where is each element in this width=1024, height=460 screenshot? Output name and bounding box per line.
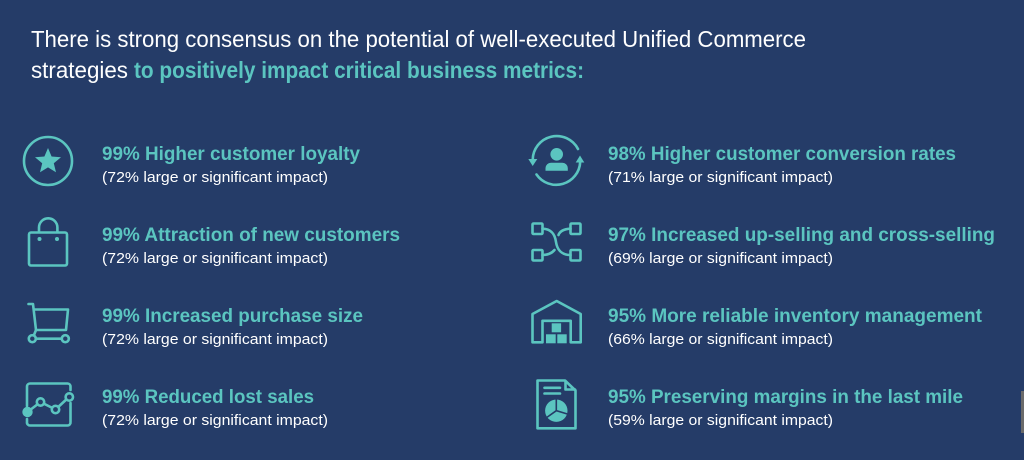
icon: shopping bag bbox=[29, 218, 67, 266]
icon: shopping cart bbox=[28, 304, 69, 342]
title: to positively impact critical business metrics: bbox=[134, 57, 584, 83]
gray scroll marker at right edge bbox=[1021, 391, 1024, 433]
title bbox=[31, 26, 806, 83]
text: customer loyalty bbox=[102, 143, 360, 186]
text: lost sales bbox=[102, 386, 328, 429]
text: margins in last mile: 95% Preserving margins in the last mile bbox=[608, 386, 963, 408]
metric: new customers bbox=[29, 218, 400, 267]
text: inventory management: (66% large or significant impact) bbox=[608, 331, 833, 348]
text: lost sales: (72% large or significant impact) bbox=[102, 412, 328, 429]
text: purchase size: 99% Increased purchase size bbox=[102, 305, 363, 327]
icon: connected nodes bbox=[532, 224, 580, 260]
metric: lost sales bbox=[22, 384, 328, 429]
icon: line chart bbox=[22, 384, 73, 426]
text: up-selling and cross-selling bbox=[608, 224, 995, 267]
metric: up-selling and cross-selling bbox=[532, 224, 995, 267]
text: conversion rates: (71% large or significant impact) bbox=[608, 169, 833, 186]
metric: margins in last mile bbox=[538, 380, 963, 429]
text: new customers bbox=[102, 224, 400, 267]
text: up-selling and cross-selling: (69% large or significant impact) bbox=[608, 250, 833, 267]
metric: purchase size bbox=[28, 304, 363, 348]
text: new customers: (72% large or significant impact) bbox=[102, 250, 328, 267]
text: inventory management: 95% More reliable inventory management bbox=[608, 305, 982, 327]
text: customer loyalty: 99% Higher customer loyalty bbox=[102, 143, 360, 165]
icon: customer in circular arrows bbox=[528, 136, 584, 185]
text: margins in last mile bbox=[608, 386, 963, 429]
icon: document with pie chart bbox=[538, 380, 576, 428]
text: purchase size: (72% large or significant impact) bbox=[102, 331, 328, 348]
text: conversion rates bbox=[608, 143, 956, 186]
metric: customer loyalty bbox=[24, 137, 360, 186]
metric: inventory management bbox=[532, 301, 982, 348]
text: customer loyalty: (72% large or significant impact) bbox=[102, 169, 328, 186]
text: margins in last mile: (59% large or significant impact) bbox=[608, 412, 833, 429]
icon: warehouse bbox=[532, 301, 581, 343]
text: conversion rates: 98% Higher customer conversion rates bbox=[608, 143, 956, 165]
text: purchase size bbox=[102, 305, 363, 348]
text: lost sales: 99% Reduced lost sales bbox=[102, 386, 314, 408]
title: strategies bbox=[31, 57, 128, 83]
text: new customers: 99% Attraction of new customers bbox=[102, 224, 400, 246]
title: There is strong consensus on the potential of well-executed Unified Commerce bbox=[31, 26, 806, 52]
text: inventory management bbox=[608, 305, 982, 348]
metric: conversion rates bbox=[528, 136, 956, 186]
icon: star in circle bbox=[24, 137, 72, 185]
text: up-selling and cross-selling: 97% Increased up-selling and cross-selling bbox=[608, 224, 995, 246]
